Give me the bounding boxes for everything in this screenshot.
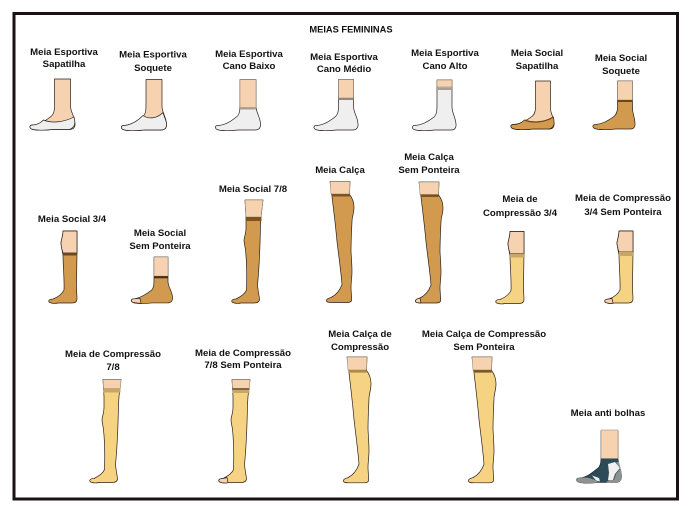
- label: Meia Calça: [404, 152, 454, 163]
- icon: meia calca sem ponteira tan: [415, 182, 443, 303]
- icon: soquete white: [121, 80, 167, 131]
- panel: Meia Esportiva Cano Medio: [310, 52, 379, 131]
- label: Meia de Compressão: [195, 348, 291, 359]
- icon: meia calca de compressao: [343, 357, 371, 483]
- icon: meia calca tan: [326, 182, 354, 302]
- panel: Meia Esportiva Cano Baixo: [215, 49, 284, 131]
- panel: Meia anti bolhas: [571, 408, 645, 483]
- label: Meia Calça de: [328, 329, 392, 340]
- label: Sem Ponteira: [453, 342, 515, 353]
- label: Sem Ponteira: [398, 165, 460, 176]
- panel: Meia de Compressao 7/8 Sem Ponteira: [195, 348, 291, 483]
- icon: anti blister sock: [576, 430, 622, 483]
- label: Meia de Compressão: [575, 193, 671, 204]
- icon: compressao 7/8 sem ponteira: [219, 380, 250, 483]
- label: 7/8 Sem Ponteira: [204, 360, 282, 371]
- icon: meia calca de compressao sem ponteira: [468, 357, 496, 483]
- label: Meia Social 7/8: [219, 184, 288, 195]
- panel: Meia Esportiva Sapatilha: [30, 47, 99, 130]
- label: Compressão 3/4: [483, 208, 558, 219]
- label: Meia Social: [595, 53, 647, 64]
- label: Sapatilha: [43, 59, 86, 70]
- label: Cano Médio: [317, 64, 371, 75]
- icon: compressao 3/4: [496, 232, 524, 304]
- label: Cano Baixo: [223, 61, 276, 72]
- icon: cano alto white: [412, 80, 456, 131]
- panel: Meia Social Soquete: [593, 53, 647, 130]
- panel: Meia Social Sem Ponteira: [129, 228, 191, 304]
- label: Meia Esportiva: [215, 49, 284, 60]
- icon: soquete tan: [593, 81, 635, 130]
- label: Meia de Compressão: [65, 349, 161, 360]
- icon: compressao 7/8: [90, 380, 121, 483]
- icon: social sem ponteira: [131, 257, 173, 304]
- panel: Meia Esportiva Soquete: [119, 50, 188, 131]
- label: Meia Calça de Compressão: [422, 329, 546, 340]
- panel: Meia Social 7/8: [219, 184, 288, 303]
- panel: Meia de Compressao 3/4 Sem Ponteira: [575, 193, 671, 303]
- label: Meia de: [502, 194, 538, 205]
- panel: Meia Social 3/4: [38, 214, 107, 303]
- label: Cano Alto: [423, 61, 468, 72]
- label: Sem Ponteira: [129, 241, 191, 252]
- label: Soquete: [602, 66, 640, 77]
- title: MEIAS FEMININAS: [309, 24, 393, 34]
- label: Meia Calça: [315, 165, 365, 176]
- label: Meia Esportiva: [30, 47, 99, 58]
- label: Meia Social: [511, 48, 563, 59]
- panel: Meia Calca de Compressao: [328, 329, 392, 483]
- panel: Meia de Compressao 7/8: [65, 349, 161, 483]
- label: Meia Social: [134, 228, 186, 239]
- label: Compressão: [331, 342, 389, 353]
- panel: Meia Calca Sem Ponteira: [398, 152, 460, 303]
- panel: Meia Calca de Compressao Sem Ponteira: [422, 329, 546, 483]
- label: Meia Esportiva: [119, 50, 188, 60]
- icon: cano baixo white: [215, 80, 261, 131]
- label: Sapatilha: [516, 61, 559, 72]
- icon: sapatilha tan: [511, 81, 554, 130]
- label: 7/8: [106, 362, 120, 373]
- label: Meia Esportiva: [310, 52, 379, 63]
- panel: Meia Calca: [315, 165, 365, 302]
- label: Meia Esportiva: [411, 48, 480, 59]
- icon: ankle sock sapatilha white: [30, 79, 75, 130]
- icon: compressao 3/4 sem ponteira: [605, 231, 633, 303]
- icon: social 7/8: [232, 200, 263, 303]
- icon: cano medio white: [314, 80, 358, 131]
- label: Meia anti bolhas: [571, 408, 645, 419]
- panel: Meia de Compressao 3/4: [483, 194, 558, 304]
- panel: Meia Esportiva Cano Alto: [411, 48, 480, 131]
- icon: social 3/4: [49, 231, 77, 303]
- label: Meia Social 3/4: [38, 214, 107, 225]
- label: 3/4 Sem Ponteira: [584, 207, 662, 218]
- panel: Meia Social Sapatilha: [511, 48, 563, 130]
- label: Soquete: [134, 63, 172, 74]
